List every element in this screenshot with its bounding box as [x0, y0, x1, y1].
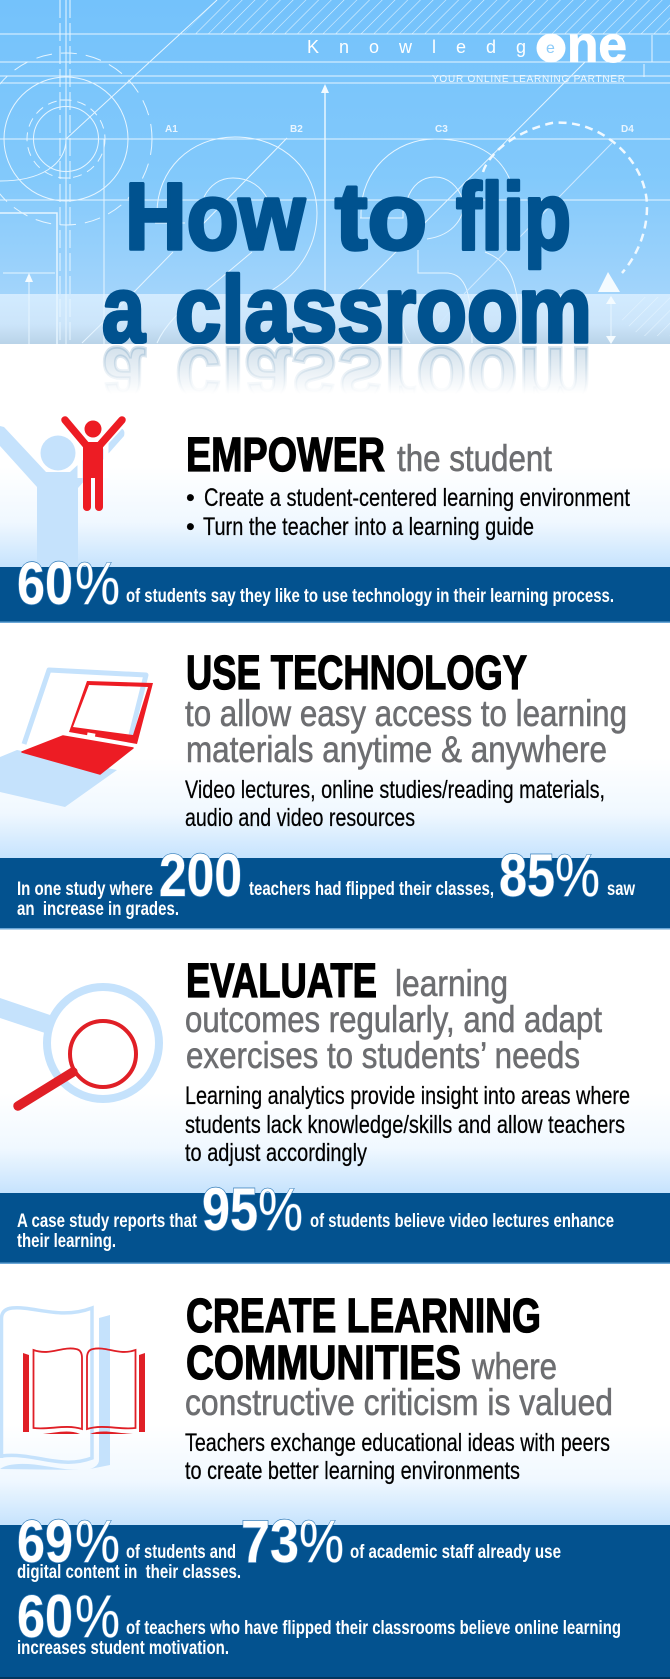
section background — [0, 758, 670, 858]
body text — [185, 1082, 630, 1167]
stat number: 69 — [17, 1508, 73, 1575]
grid labels: A1 — [165, 124, 178, 135]
bullet list — [186, 484, 630, 541]
logo: Knowledg — [307, 37, 526, 57]
title: to — [335, 164, 427, 270]
stat number — [17, 1508, 120, 1575]
body text: to create better learning environments — [185, 1457, 520, 1485]
grid labels: B2 — [290, 124, 303, 135]
stat number: % — [299, 1508, 344, 1575]
title: flip — [456, 164, 571, 270]
stat text: of students and — [126, 1542, 236, 1563]
bullet list: • — [186, 513, 195, 541]
section background — [0, 1425, 670, 1525]
subheading: exercises to students’ needs — [186, 1035, 580, 1076]
subheading — [185, 1346, 613, 1423]
heading: EMPOWER — [186, 429, 385, 482]
stat text: an increase in grades. — [17, 899, 179, 920]
logo: ne — [567, 16, 627, 73]
icon: book — [23, 1348, 145, 1434]
panel: evaluate — [0, 955, 670, 1193]
subheading: where — [471, 1346, 557, 1387]
heading — [186, 1290, 541, 1390]
header background — [0, 0, 670, 294]
header light band — [0, 294, 670, 344]
title: How — [125, 164, 306, 270]
section background — [0, 467, 670, 567]
logo — [307, 16, 627, 73]
body text: audio and video resources — [185, 804, 415, 832]
icon: person shadow — [0, 426, 124, 567]
stat number — [202, 1176, 303, 1243]
stat text: increases student motivation. — [17, 1638, 229, 1659]
body text: to adjust accordingly — [185, 1139, 367, 1167]
heading: USE TECHNOLOGY — [186, 647, 527, 700]
subheading: the student — [397, 438, 553, 479]
stat text: In one study where — [17, 879, 153, 900]
icon: magnifier — [18, 1021, 136, 1106]
stat text: A case study reports that — [17, 1211, 198, 1232]
stat number: 200 — [159, 842, 242, 909]
body text — [185, 1429, 610, 1485]
stat number: 95 — [202, 1176, 258, 1243]
section background — [0, 1093, 670, 1193]
stat number: % — [75, 1583, 120, 1650]
subheading: materials anytime & anywhere — [186, 729, 607, 770]
icon: person — [65, 418, 122, 511]
stat number — [499, 842, 600, 909]
stat number: 60 — [17, 1583, 73, 1650]
stat text: saw — [607, 879, 635, 900]
stat number — [17, 550, 120, 617]
stat number: 73 — [241, 1508, 299, 1575]
blueprint drawing — [0, 0, 670, 344]
logo tagline: YOUR ONLINE LEARNING PARTNER — [432, 74, 625, 85]
heading: COMMUNITIES — [186, 1337, 461, 1390]
subheading: outcomes regularly, and adapt — [185, 999, 603, 1040]
title: classroom — [175, 257, 592, 363]
icon: book shadow — [0, 1308, 110, 1470]
body text — [185, 776, 605, 832]
stat number: % — [75, 550, 120, 617]
icon: laptop shadow — [0, 670, 146, 807]
logo: e — [546, 40, 555, 57]
stat bar 4 — [0, 1508, 670, 1679]
stat text: of academic staff already use — [350, 1542, 561, 1563]
stat number: 60 — [17, 550, 73, 617]
stat bar 2 — [0, 842, 670, 930]
panel: empower — [0, 418, 670, 567]
grid labels: C3 — [435, 124, 448, 135]
heading: CREATE LEARNING — [186, 1290, 541, 1343]
stat text: teachers had flipped their classes, — [249, 879, 494, 900]
heading: EVALUATE — [186, 955, 377, 1008]
stat number: % — [258, 1176, 303, 1243]
bullet list: • — [186, 484, 195, 512]
hatch pattern top — [183, 0, 670, 34]
title: a — [102, 257, 146, 363]
bullet list: Turn the teacher into a learning guide — [203, 513, 534, 541]
icon: magnifier shadow — [0, 987, 159, 1099]
stat text: their learning. — [17, 1231, 116, 1252]
white cover under header — [0, 344, 670, 347]
stat number: 85 — [499, 842, 555, 909]
title reflection: a — [102, 327, 146, 433]
stat text: digital content in their classes. — [17, 1562, 241, 1583]
subheading: constructive criticism is valued — [185, 1382, 613, 1423]
stat number — [17, 1583, 120, 1650]
hatch pattern bottom — [622, 297, 670, 336]
subheading — [185, 693, 627, 770]
stat bar 1 — [0, 550, 670, 623]
stat number — [241, 1508, 344, 1575]
icon: laptop — [22, 681, 153, 774]
panel: use technology — [0, 647, 670, 858]
grid labels: D4 — [621, 124, 634, 135]
subheading: learning — [395, 963, 508, 1004]
panel: create learning communities — [0, 1290, 670, 1525]
stat number: % — [75, 1508, 120, 1575]
stat bar 3 — [0, 1176, 670, 1264]
grid labels — [165, 124, 634, 135]
panel: header — [0, 0, 670, 363]
stat number: % — [555, 842, 600, 909]
title reflection: classroom — [175, 327, 592, 433]
arrowheads — [25, 84, 620, 344]
blueprint dashed arrow — [483, 123, 647, 273]
subheading — [185, 963, 603, 1076]
title — [102, 164, 592, 363]
